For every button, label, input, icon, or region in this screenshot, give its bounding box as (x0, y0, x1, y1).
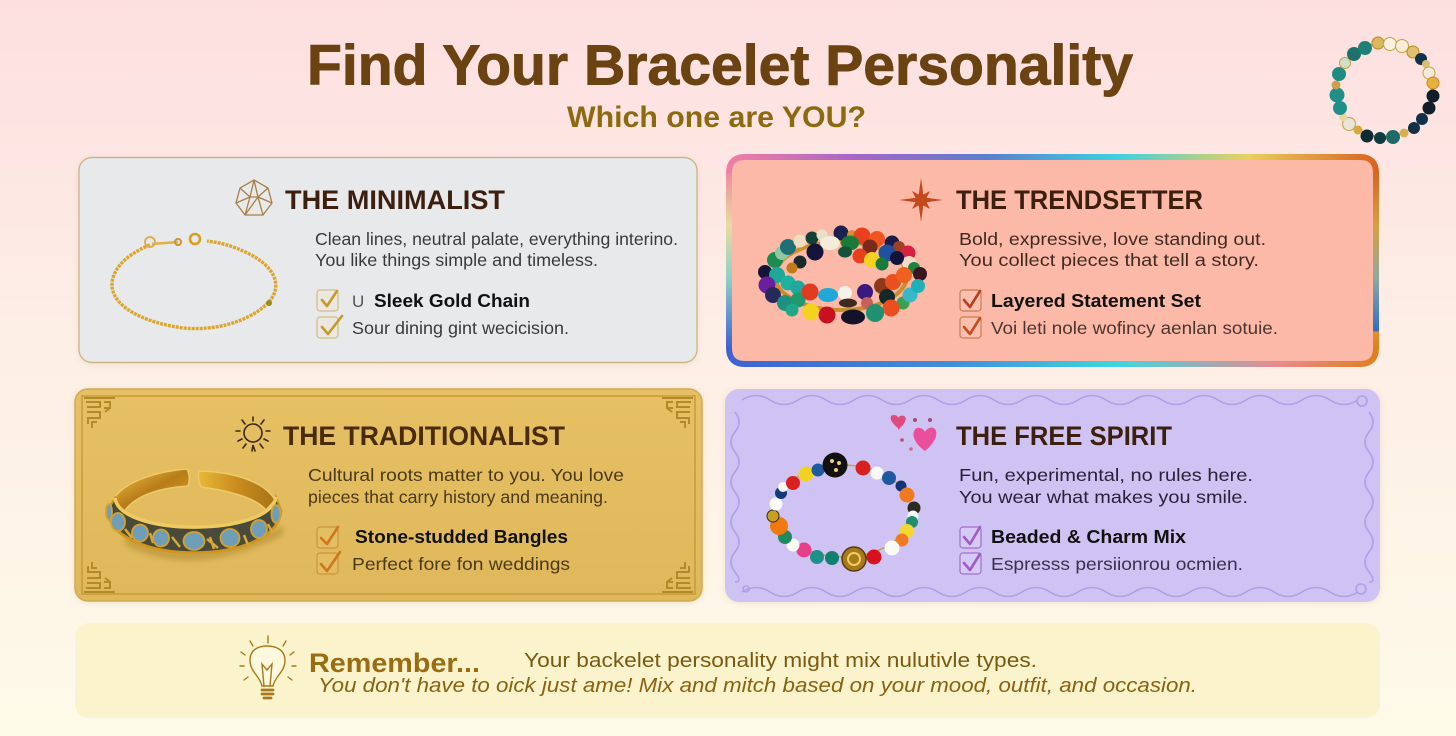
description (308, 465, 624, 507)
checklist: Sour dining gint wecicision. (352, 318, 569, 338)
icon: geometric gem (236, 180, 272, 215)
checklist: U (352, 292, 364, 311)
wavy border (731, 396, 1373, 596)
icon: sun (236, 417, 270, 451)
checklist (960, 527, 1243, 574)
heading: THE TRENDSETTER (956, 185, 1203, 215)
description: Fun, experimental, no rules here. (959, 465, 1253, 485)
bracelet: beads and charms (767, 452, 920, 571)
panel: the free spirit (725, 389, 1380, 602)
subtitle: Which one are YOU? (567, 101, 866, 134)
callout line 1: Your backelet personality might mix nulutivle types. (524, 650, 1037, 672)
checklist: Stone-studded Bangles (355, 527, 568, 547)
checklist: Beaded & Charm Mix (991, 527, 1186, 547)
description: You like things simple and timeless. (315, 250, 598, 270)
panel: the minimalist (79, 158, 697, 362)
heading: THE TRADITIONALIST (283, 421, 565, 451)
description: Clean lines, neutral palate, everything interino. (315, 229, 678, 249)
bracelet: layered beads (758, 226, 927, 324)
decorative bracelet: top right (1330, 37, 1440, 144)
panel: the trendsetter (729, 157, 1376, 364)
bracelet: gold chain (112, 234, 276, 329)
description: Bold, expressive, love standing out. (959, 229, 1266, 249)
bracelet: stone-studded bangle (106, 469, 283, 560)
description (959, 465, 1253, 507)
description: Cultural roots matter to you. You love (308, 465, 624, 485)
checklist (317, 290, 569, 338)
description (959, 229, 1266, 270)
panel: remember callout (75, 623, 1380, 718)
corner ornaments (84, 398, 693, 592)
checklist: Layered Statement Set (991, 291, 1201, 311)
description: pieces that carry history and meaning. (308, 487, 608, 507)
description: You collect pieces that tell a story. (959, 250, 1259, 270)
checklist: Voi leti nole wofincy aenlan sotuie. (991, 318, 1278, 338)
checklist: Espresss persiionrou ocmien. (991, 554, 1243, 574)
description (315, 229, 678, 270)
heading: THE FREE SPIRIT (956, 421, 1172, 451)
title: Find Your Bracelet Personality (307, 34, 1133, 98)
callout line 2: You don't have to oick just ame! Mix and mitch based on your mood, outfit, and occasion. (318, 675, 1197, 697)
checklist: Perfect fore fon weddings (352, 554, 570, 574)
checklist (960, 290, 1278, 338)
icon: lightbulb (240, 636, 296, 698)
description: You wear what makes you smile. (959, 487, 1248, 507)
heading: THE MINIMALIST (285, 185, 506, 215)
callout heading: Remember... (309, 648, 480, 678)
icon: starburst (899, 178, 943, 222)
checklist (317, 527, 570, 574)
icon: hearts (891, 415, 936, 451)
panel: the traditionalist (75, 389, 702, 601)
checklist: Sleek Gold Chain (374, 291, 530, 311)
